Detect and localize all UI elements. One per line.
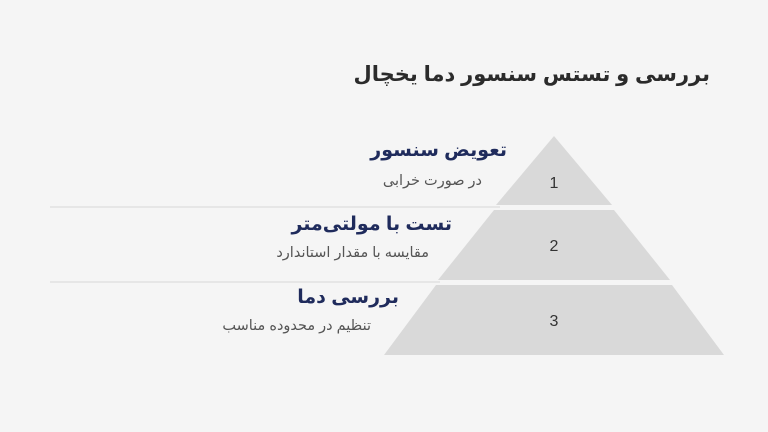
item 1 text: در صورت خرابی xyxy=(383,173,482,189)
item 2 text: مقایسه با مقدار استاندارد xyxy=(276,245,429,261)
item 2 heading: تست با مولتی‌متر xyxy=(291,214,452,235)
tier 1: 1 xyxy=(550,175,559,192)
tier 3 xyxy=(384,285,724,355)
item 3 text: تنظیم در محدوده مناسب xyxy=(222,318,371,334)
tier 2 xyxy=(438,210,670,280)
tier 3: 3 xyxy=(550,313,559,330)
tier 1 xyxy=(496,136,612,205)
title: بررسی و تستس سنسور دما یخچال xyxy=(354,63,710,86)
tier 2: 2 xyxy=(550,238,559,255)
item 3 heading: بررسی دما xyxy=(297,287,399,308)
item 1 heading: تعویض سنسور xyxy=(370,140,507,161)
